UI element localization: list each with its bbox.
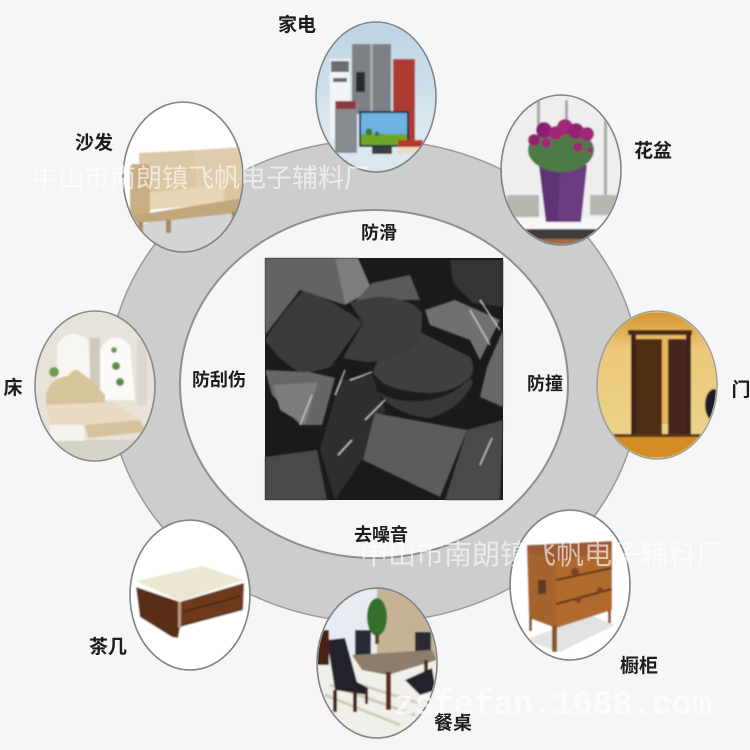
label: 沙发: 沙发 — [75, 131, 113, 154]
label: 花盆: 花盆 — [634, 140, 672, 162]
label: 餐桌: 餐桌 — [434, 712, 472, 734]
ring label: 去噪音: 去噪音 — [354, 524, 408, 545]
icon circle: coffee table — [130, 520, 250, 670]
label: 家电: 家电 — [278, 13, 316, 36]
icon circle: dining table — [317, 588, 437, 738]
label: 门: 门 — [731, 379, 750, 401]
watermark: url: zsfefan.1688.com — [394, 687, 712, 725]
icon circle: sofa — [122, 102, 244, 252]
ring label: 防滑: 防滑 — [361, 222, 397, 243]
ring label: 防刮伤: 防刮伤 — [192, 369, 246, 390]
watermark: middle: 中山市南朗镇飞帆电子辅料厂 — [360, 539, 724, 570]
label: 床: 床 — [3, 376, 23, 399]
center photo: anti-slip pads — [265, 258, 503, 500]
icon circle: door — [597, 311, 723, 459]
grey ring — [108, 140, 640, 622]
watermark: top: 中山市南朗镇飞帆电子辅料厂 — [32, 163, 370, 193]
label: 茶几: 茶几 — [89, 636, 127, 658]
icon circle: cabinet — [510, 510, 630, 660]
icon circle: flower pot — [501, 95, 622, 245]
icon circle: appliances — [316, 22, 436, 172]
ring label: 防撞: 防撞 — [527, 373, 563, 394]
icon circle: bed — [35, 311, 155, 461]
label: 橱柜: 橱柜 — [620, 655, 658, 677]
